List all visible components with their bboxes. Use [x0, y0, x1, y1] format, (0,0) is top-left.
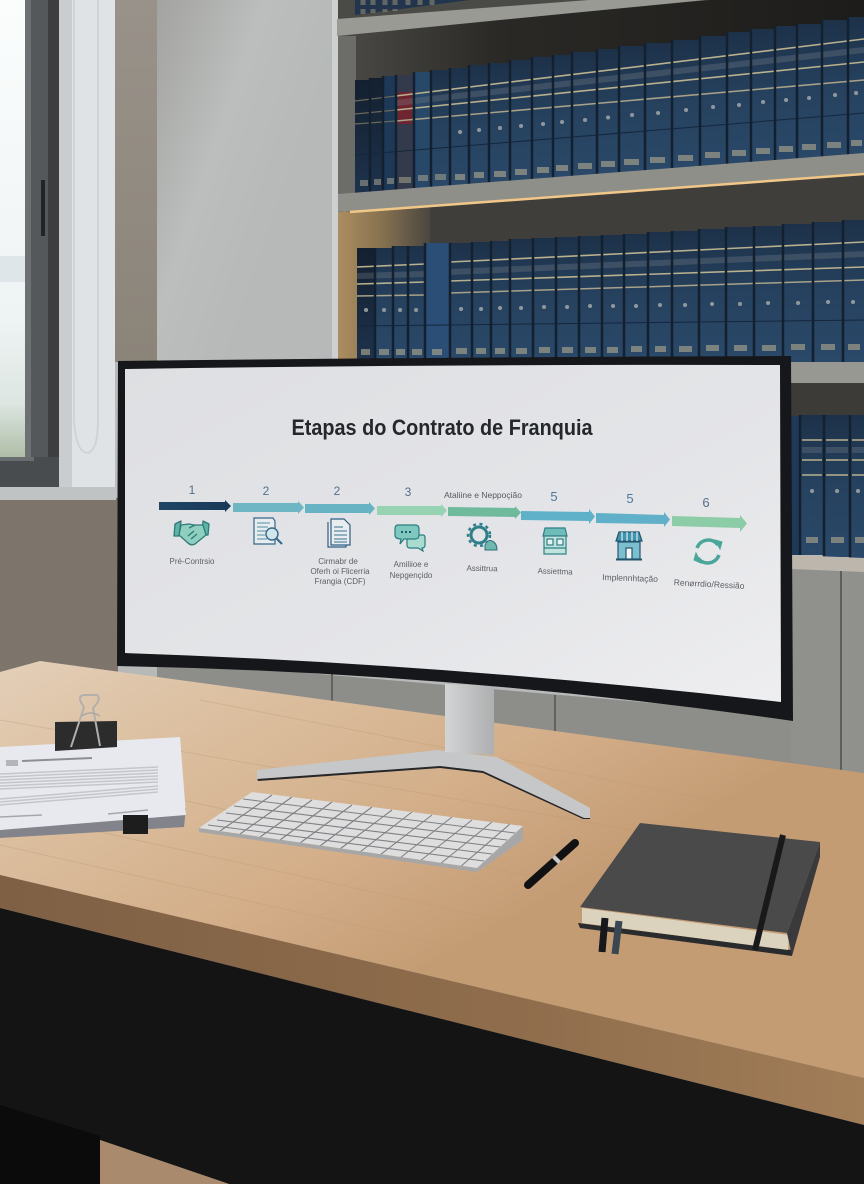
step numbers: 3: [405, 485, 412, 499]
top shelf board: [337, 0, 705, 36]
step labels: Nepgençido: [390, 571, 433, 580]
upper cavity: [338, 0, 864, 195]
arrow 3: [305, 502, 375, 515]
icon: store with awning: [616, 532, 642, 560]
lower right shelf: [780, 362, 864, 558]
pen: [528, 843, 575, 885]
desk leg: [0, 1105, 100, 1184]
book row 1: [355, 17, 864, 193]
ribbons: [602, 918, 619, 954]
icon: storefront: [543, 528, 567, 554]
bezel: [117, 356, 793, 721]
step labels: Frangia (CDF): [314, 577, 366, 586]
step numbers: Ataliine e Neppoçião: [444, 490, 522, 500]
step labels: Assiettma: [537, 566, 573, 577]
small clip: [123, 815, 148, 834]
step labels: Pré-Contrsio: [170, 557, 215, 566]
step numbers: 1: [189, 483, 196, 497]
step numbers: [189, 483, 710, 510]
arrow 8: [672, 515, 747, 532]
step labels: Amiliioe e: [394, 560, 429, 569]
monitor: [117, 356, 793, 721]
step labels: [170, 557, 745, 591]
notebook: [578, 823, 820, 956]
step labels: Implennhtação: [602, 572, 658, 584]
book row 2: [357, 220, 864, 362]
step numbers: 2: [334, 484, 341, 498]
arrow 2: [233, 501, 304, 514]
icon: contract document: [328, 519, 350, 547]
step numbers: 6: [702, 495, 710, 510]
screen: [125, 365, 781, 702]
document stack: [0, 695, 186, 838]
desk front panel: [0, 908, 864, 1184]
arrow 5: [448, 506, 521, 519]
step labels: Renørrdio/Ressião: [674, 577, 745, 591]
floor: [100, 1140, 229, 1184]
monitor stand: [257, 684, 590, 819]
step numbers: 5: [626, 491, 634, 506]
arrow 7: [596, 512, 670, 527]
arrow 4: [377, 504, 447, 517]
arrow 6: [521, 509, 595, 524]
desk: [0, 661, 864, 1184]
icon: handshake: [174, 521, 209, 545]
step numbers: 2: [263, 484, 270, 498]
step labels: Oferh oi Flicerria: [310, 567, 370, 576]
wall background: [0, 0, 864, 800]
icon: gear support: [468, 524, 497, 550]
timeline arrows: [159, 500, 747, 532]
arrow 1: [159, 500, 231, 512]
binder clip: [55, 695, 117, 751]
bookshelf: [332, 0, 864, 558]
icon: chat bubbles: [395, 525, 425, 551]
window: [0, 0, 157, 673]
title: Etapas do Contrato de Franquia: [292, 415, 593, 440]
icon: document search: [254, 518, 282, 544]
step labels: Cirmabr de: [318, 557, 358, 566]
step numbers: 5: [550, 489, 558, 504]
keyboard: [199, 792, 523, 872]
step labels: Assittrua: [466, 564, 498, 573]
elastic band: [755, 835, 783, 950]
icon: renewal cycle: [694, 540, 722, 563]
shelf board with LED: [338, 153, 864, 362]
cabinet: [157, 555, 864, 780]
